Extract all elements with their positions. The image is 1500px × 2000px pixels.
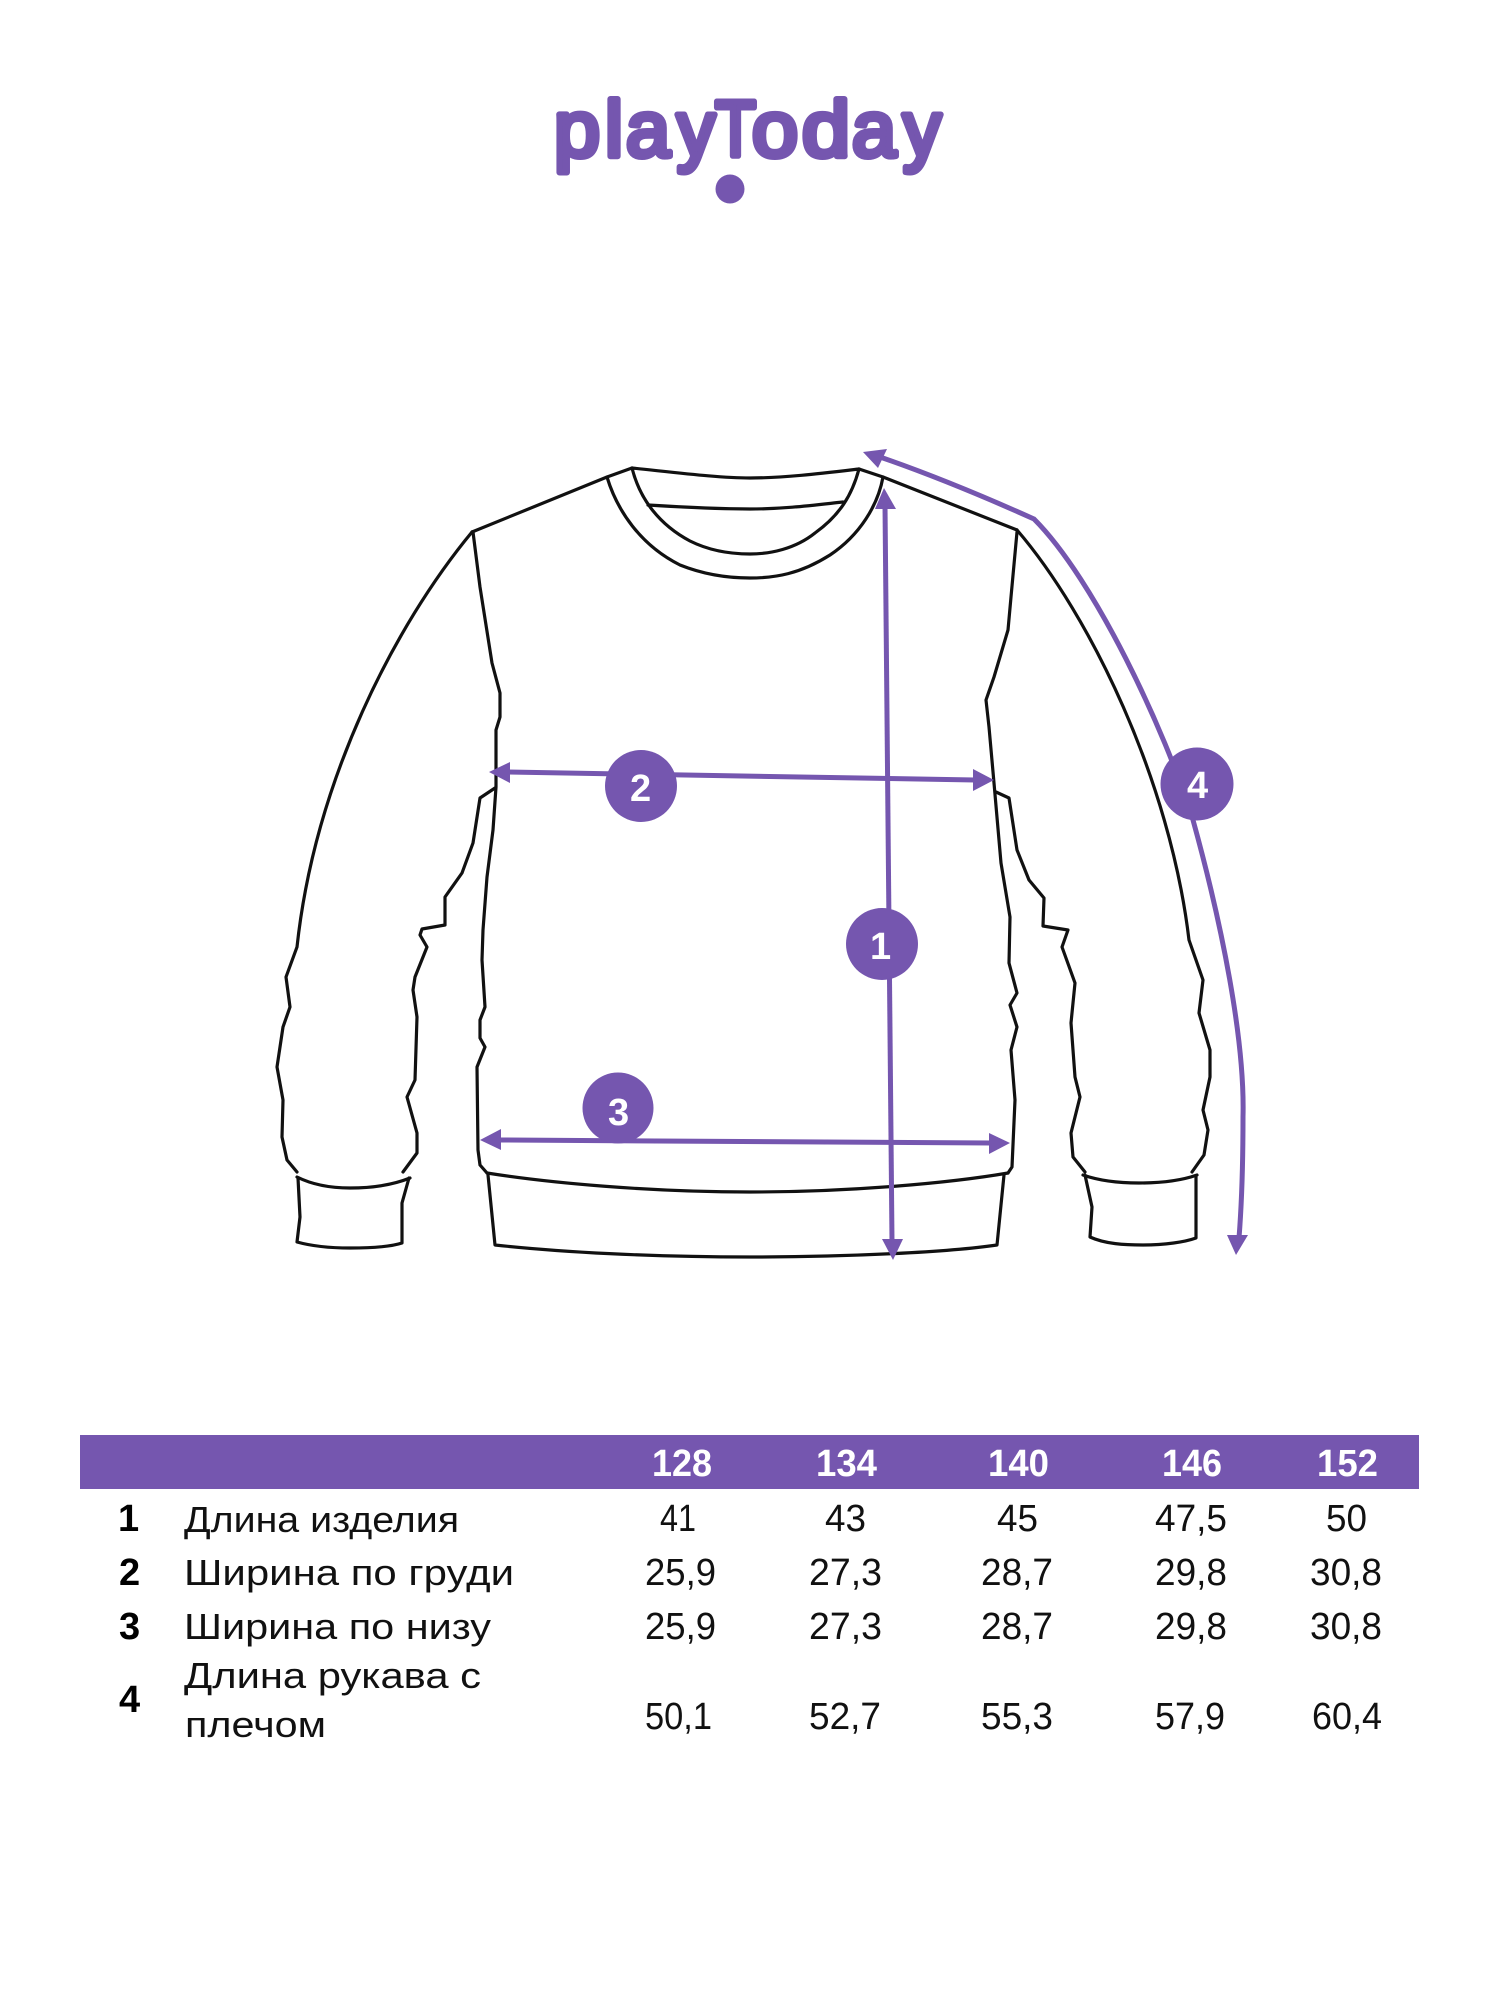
row 3: hem width xyxy=(119,1606,1382,1648)
table header bar: 140 xyxy=(988,1443,1049,1485)
row 4: sleeve length with shoulder: 52,7 xyxy=(809,1696,881,1738)
arrow 2: chest width xyxy=(489,762,994,791)
row 1: garment length: 50 xyxy=(1326,1498,1367,1540)
row 3: hem width: 25,9 xyxy=(645,1606,716,1648)
logo: playToday: p xyxy=(554,84,600,173)
row 1: garment length: 45 xyxy=(997,1498,1038,1540)
shoulders xyxy=(472,468,1017,532)
collar and neckline xyxy=(607,468,883,578)
row 4: sleeve length with shoulder: Длина рукава с xyxy=(184,1655,481,1696)
row 3: hem width: 27,3 xyxy=(809,1606,882,1648)
row 3: hem width: 28,7 xyxy=(981,1606,1053,1648)
row 1: garment length xyxy=(118,1498,1367,1540)
row 2: chest width: Ширина по груди xyxy=(184,1552,514,1593)
row 4: sleeve length with shoulder: 60,4 xyxy=(1312,1696,1382,1738)
row 4: sleeve length with shoulder: 50,1 xyxy=(645,1696,712,1738)
row 1: garment length: 1 xyxy=(118,1498,139,1540)
row 1: garment length: Длина изделия xyxy=(184,1499,459,1540)
badge 1: 1 xyxy=(870,926,891,968)
row 3: hem width: Ширина по низу xyxy=(184,1606,491,1647)
logo: playToday: a xyxy=(852,84,896,173)
badge 4 xyxy=(1160,748,1234,820)
row 2: chest width: 29,8 xyxy=(1155,1552,1227,1594)
row 3: hem width: 30,8 xyxy=(1310,1606,1382,1648)
arrow 3: hem width xyxy=(480,1129,1010,1154)
badge 2 xyxy=(605,750,677,822)
row 2: chest width: 2 xyxy=(119,1552,140,1594)
row 1: garment length: 43 xyxy=(825,1498,866,1540)
row 1: garment length: 41 xyxy=(660,1498,696,1540)
arrow 1: garment length xyxy=(875,488,903,1260)
row 4: sleeve length with shoulder xyxy=(119,1655,1382,1745)
table header bar xyxy=(80,1435,1419,1489)
logo: playToday: a xyxy=(626,84,670,173)
row 4: sleeve length with shoulder: 57,9 xyxy=(1155,1696,1225,1738)
row 3: hem width: 3 xyxy=(119,1606,140,1648)
row 2: chest width: 27,3 xyxy=(809,1552,882,1594)
right sleeve xyxy=(996,530,1210,1245)
badge 3 xyxy=(582,1072,654,1144)
hem xyxy=(487,1173,1008,1257)
logo: playToday: T xyxy=(715,84,756,173)
badge 3: 3 xyxy=(608,1092,629,1134)
logo: playToday: o xyxy=(752,84,798,173)
row 4: sleeve length with shoulder: 4 xyxy=(119,1679,140,1721)
row 2: chest width: 30,8 xyxy=(1310,1552,1382,1594)
badge 2: 2 xyxy=(630,768,651,810)
arrow 4: sleeve length with shoulder xyxy=(863,449,1248,1255)
sweatshirt outline drawing xyxy=(277,468,1210,1257)
row 4: sleeve length with shoulder: 55,3 xyxy=(981,1696,1053,1738)
logo: playToday: l xyxy=(605,84,623,173)
badge 4: 4 xyxy=(1187,765,1208,807)
row 2: chest width: 25,9 xyxy=(645,1552,716,1594)
body sides and armholes xyxy=(473,532,1017,1173)
logo: playToday xyxy=(554,84,941,204)
logo: playToday: d xyxy=(802,84,850,173)
left sleeve xyxy=(277,532,495,1248)
row 2: chest width: 28,7 xyxy=(981,1552,1053,1594)
badge 1 xyxy=(846,908,918,980)
table header bar: 128 xyxy=(652,1443,712,1485)
row 4: sleeve length with shoulder: плечом xyxy=(185,1704,326,1745)
size table xyxy=(80,1435,1419,1745)
table header bar: 146 xyxy=(1162,1443,1222,1485)
row 3: hem width: 29,8 xyxy=(1155,1606,1227,1648)
logo: playToday: y xyxy=(677,84,715,173)
table header bar: 134 xyxy=(816,1443,877,1485)
logo: playToday: y xyxy=(903,84,941,173)
row 2: chest width xyxy=(119,1552,1382,1594)
row 1: garment length: 47,5 xyxy=(1155,1498,1227,1540)
table header bar: 152 xyxy=(1317,1443,1378,1485)
